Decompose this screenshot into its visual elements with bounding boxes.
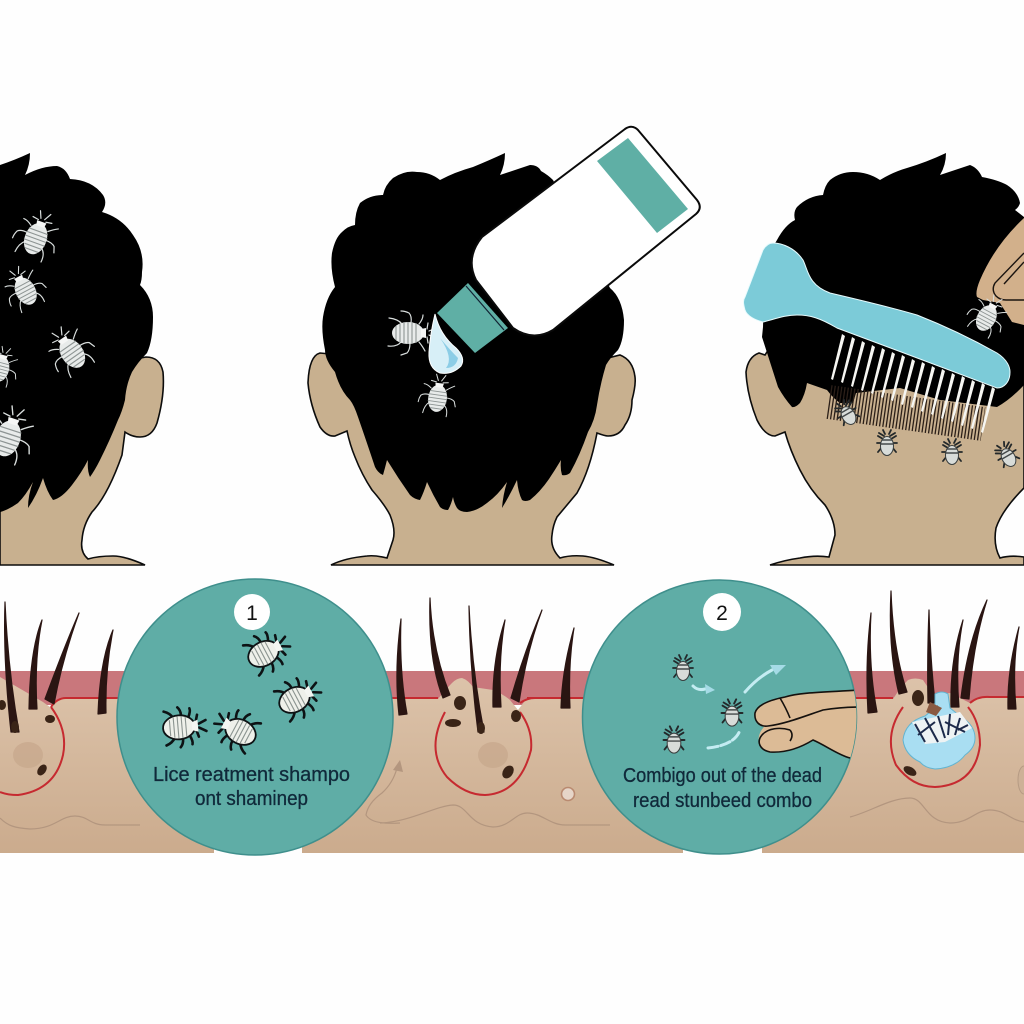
circle background [582,580,856,854]
head skin and ears [308,353,635,565]
panel: head with comb [744,153,1024,565]
icon: louse below comb 3 [942,439,962,464]
hairs, first section [5,602,113,732]
scalp pink layer [0,671,1024,705]
hairs, second section [397,598,574,732]
fingernail [993,253,1024,300]
arrow: curved lower [708,730,740,748]
bottle label [597,138,688,233]
follicle 2 [392,698,590,795]
comb coarse teeth [831,334,995,433]
hand with fingers [755,690,860,760]
hair [762,153,1024,407]
icon: louse 3 [38,318,102,382]
follicle 1 [0,698,125,795]
icon: louse under drop [417,372,459,418]
number badge 1: 1 [246,602,258,625]
icon: louse 2 [0,260,52,316]
icon: louse c [161,705,208,749]
shampoo drop [429,314,463,373]
step 2 caption: read stunbeed combo [633,790,812,812]
small arrowhead in skin [393,760,403,772]
icon: louse d [207,702,264,757]
icon: louse a [240,624,297,679]
icon: louse 1 [8,205,66,265]
skin layer [0,677,1024,853]
circle background [117,579,393,855]
infographic: lice treatment illustration [0,126,1024,856]
panel: step 1 circle [117,579,393,855]
icon: louse below comb 1 [832,397,862,429]
step 1 caption: ont shaminep [195,788,308,810]
head skin and ear [746,300,1024,565]
hand holding comb [976,218,1024,325]
step 2 caption: Combigo out of the dead [623,765,822,787]
bottle neck [437,283,508,353]
icon: louse on scalp [388,311,436,355]
hair [0,153,153,512]
icon: louse below comb 2 [877,430,897,456]
head skin and ear [0,357,163,565]
bottle body [472,127,700,336]
number badge 2: 2 [716,602,728,625]
number badge 1 [234,594,270,630]
foam and dead lice [903,692,975,769]
hair [322,153,624,512]
panel: step 2 circle [582,580,860,854]
icon: louse below comb 4 [992,439,1022,471]
follicle spots and shading [0,690,924,781]
panel: scalp cross-section strip [0,591,1024,853]
icon: louse e [673,655,693,680]
lower skin contour lines [0,768,1024,829]
icon: louse b [271,670,328,725]
step 1 caption: Lice reatment shampo [153,764,350,786]
panel: head with shampoo bottle [308,127,700,565]
panel: head with lice [0,153,163,565]
follicle 3 [850,697,1024,787]
icon: louse 5 [0,400,42,468]
icon: louse 4 [0,343,23,389]
skin oval at right edge [1018,766,1024,794]
icon: louse by fingers [962,288,1014,342]
number badge 2 [703,593,741,631]
arrow: short dashed [693,684,715,694]
comb fine teeth [829,402,983,424]
icon: louse g [664,726,684,753]
skin bump [562,788,574,800]
arrow: upward [745,665,786,692]
icon: shampoo bottle [429,127,700,373]
hairs, third section [867,591,1019,713]
comb handle [744,243,1010,388]
icon: louse f [722,699,742,726]
